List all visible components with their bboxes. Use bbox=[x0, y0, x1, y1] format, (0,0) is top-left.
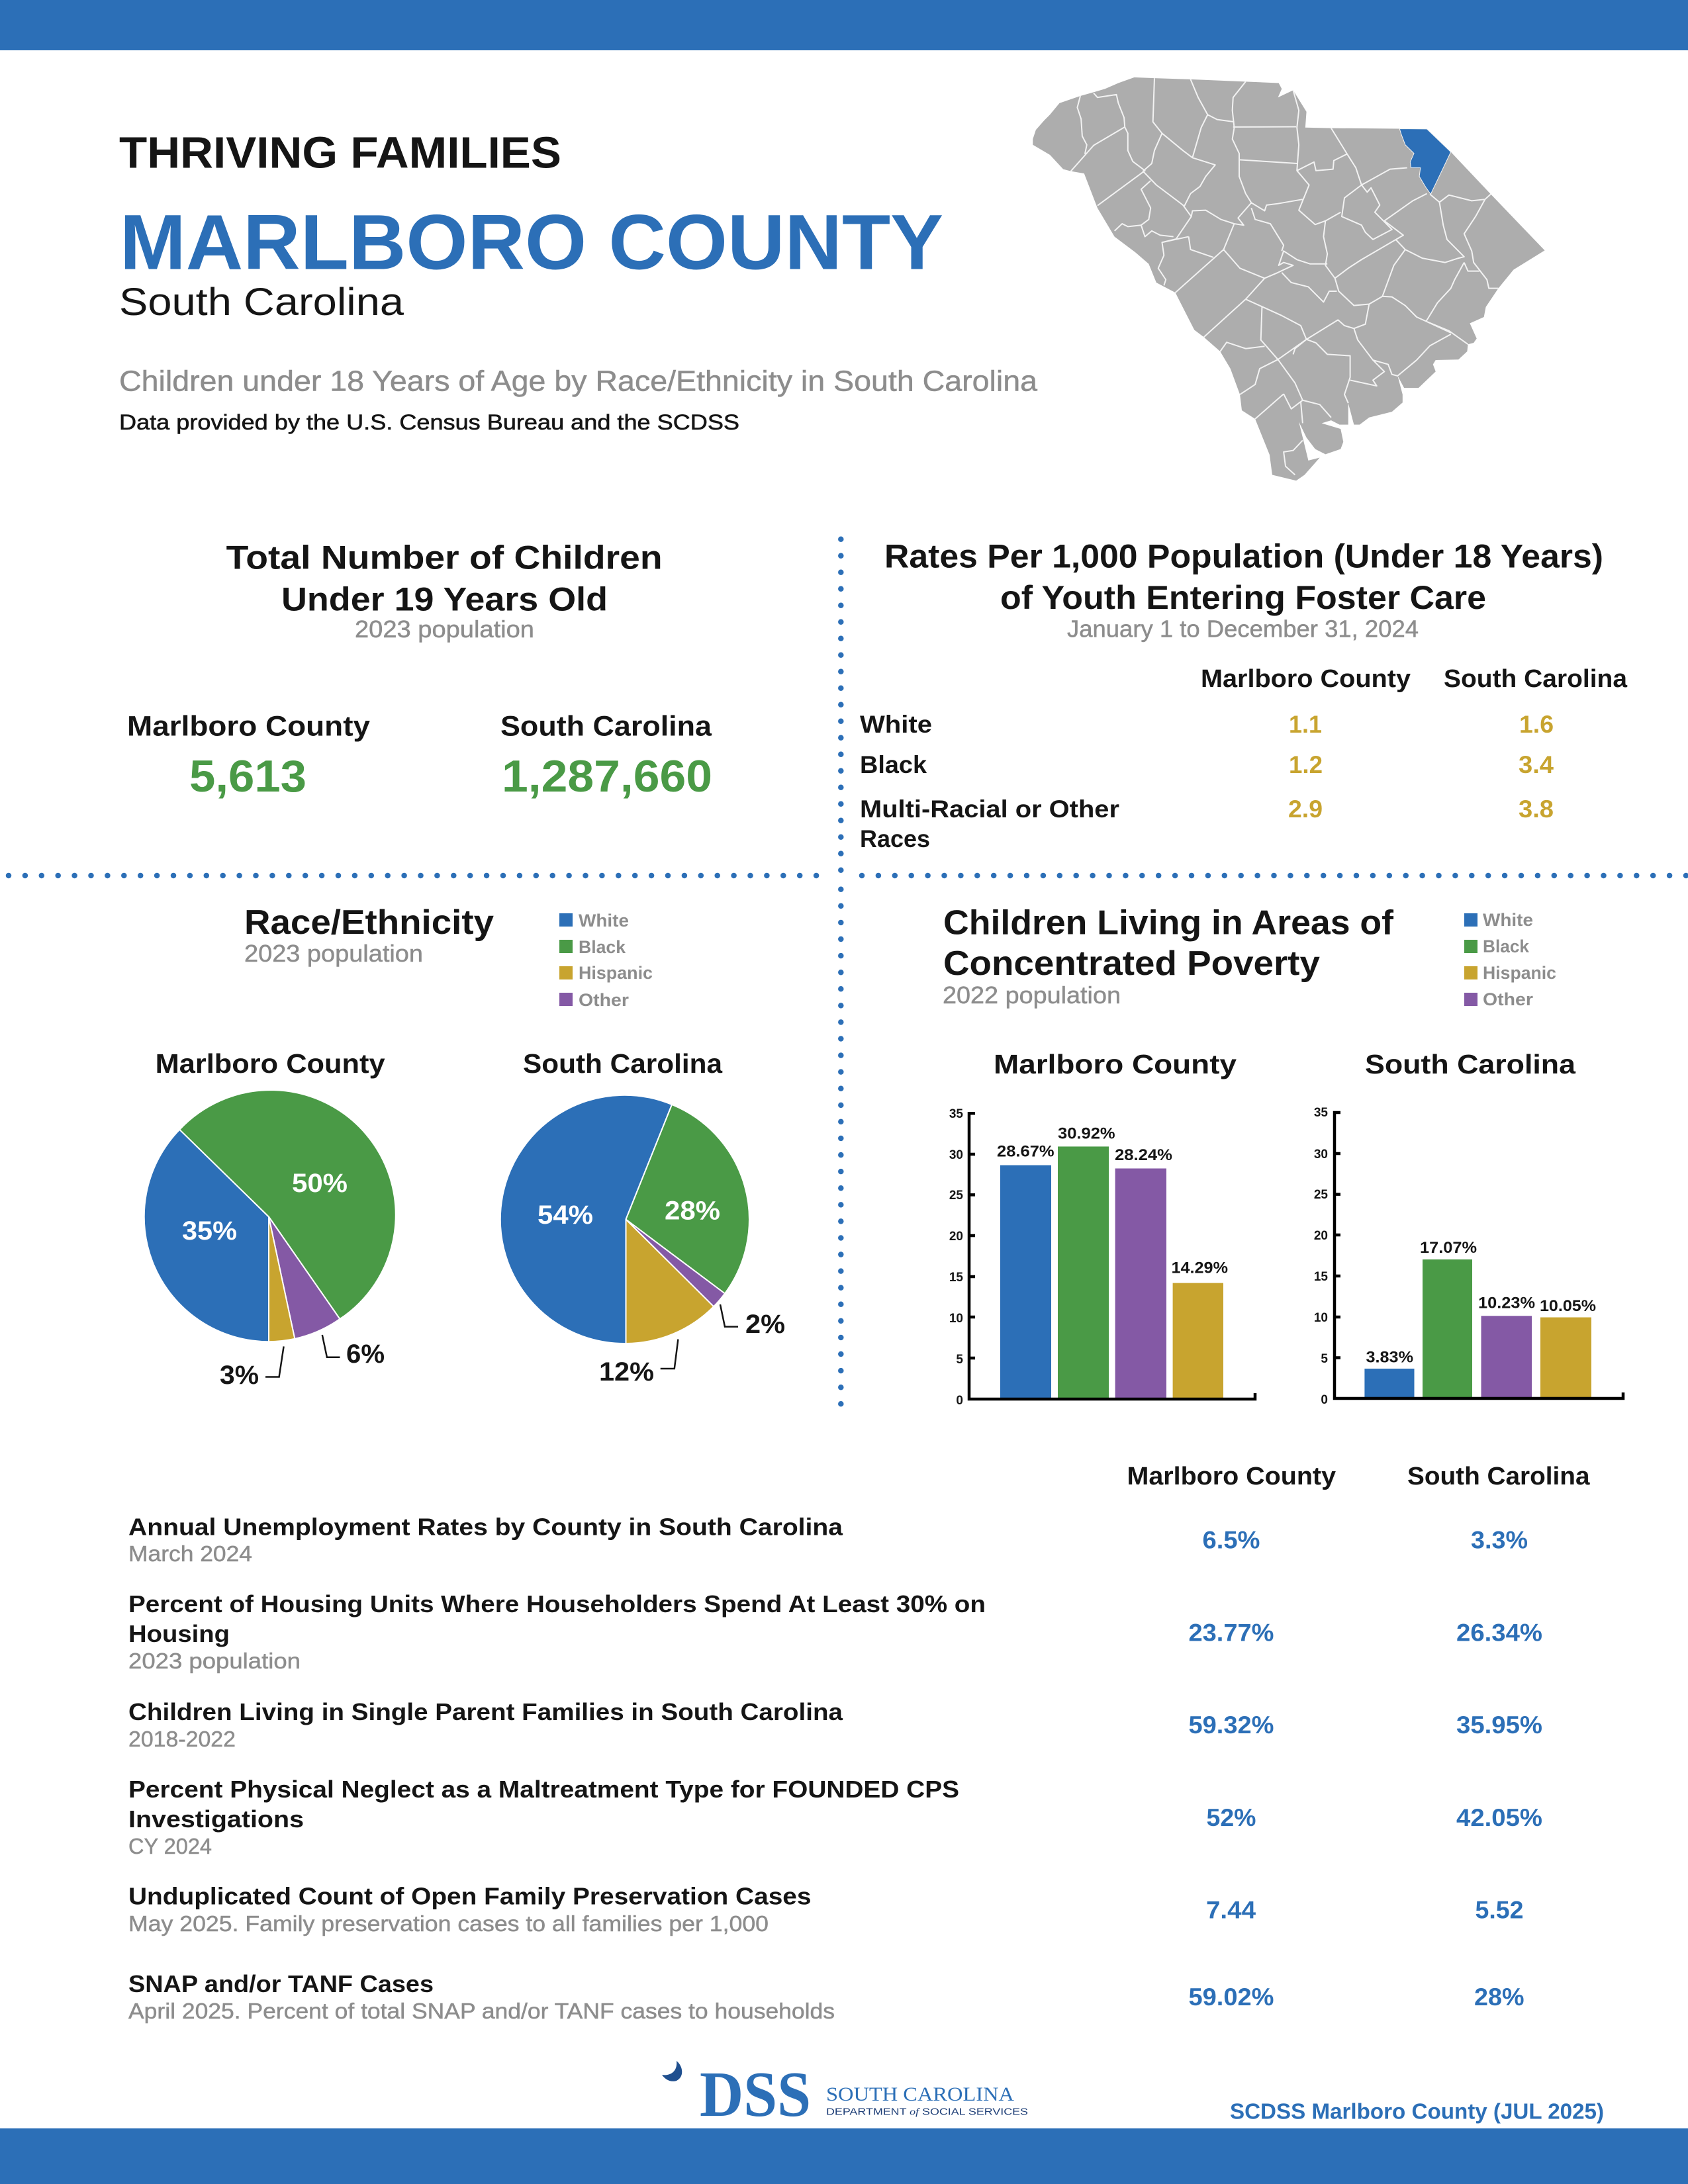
bar values: 14.29% bbox=[1172, 1259, 1228, 1277]
pie labels: Marlboro: 3% bbox=[220, 1361, 259, 1390]
subheading: 2022 population bbox=[943, 981, 1121, 1009]
heading: Rates Per 1,000 Population (Under 18 Years) bbox=[884, 538, 1603, 575]
heading: Total Number of Children bbox=[226, 539, 663, 576]
row: family preservation: 5.52 bbox=[1475, 1896, 1524, 1923]
pie labels: Marlboro: 6% bbox=[346, 1340, 385, 1369]
row: Multi-Racial: 3.8 bbox=[1519, 796, 1554, 823]
pie chart: Marlboro bbox=[144, 1090, 396, 1342]
row: unemployment: Annual Unemployment Rates by County in South Carolina bbox=[128, 1513, 843, 1540]
bar values: 30.92% bbox=[1058, 1125, 1115, 1143]
pie labels: South Carolina: 12% bbox=[599, 1357, 654, 1387]
row: housing: 26.34% bbox=[1456, 1619, 1542, 1647]
agency subtitle: DEPARTMENT of SOCIAL SERVICES bbox=[826, 2107, 1028, 2118]
axes bbox=[1335, 1113, 1623, 1398]
pie labels: Marlboro bbox=[182, 1169, 385, 1390]
bar chart: Marlboro bbox=[949, 1107, 1255, 1408]
bar values: 17.07% bbox=[1420, 1239, 1477, 1257]
row: White: White bbox=[860, 711, 932, 738]
axis numbers: 10 bbox=[949, 1312, 963, 1326]
row: physical neglect: Investigations bbox=[128, 1805, 304, 1833]
map: South Carolina counties with Marlboro highlighted bbox=[1033, 77, 1545, 480]
pie labels: Marlboro: 50% bbox=[292, 1169, 348, 1198]
column head: South Carolina: South Carolina bbox=[1444, 665, 1628, 693]
legend: White bbox=[1483, 910, 1533, 930]
heading line 2: Concentrated Poverty bbox=[943, 944, 1320, 983]
legend: Black bbox=[1483, 936, 1530, 956]
panel: total number of children bbox=[127, 539, 712, 801]
row: unemployment: March 2024 bbox=[128, 1541, 252, 1566]
Marlboro county shape bbox=[1399, 128, 1451, 194]
heading line 2: Under 19 Years Old bbox=[281, 581, 608, 618]
row: physical neglect: CY 2024 bbox=[128, 1834, 212, 1858]
bar chart: South Carolina bbox=[1314, 1106, 1623, 1407]
row: unemployment: 6.5% bbox=[1202, 1526, 1260, 1553]
row: physical neglect bbox=[128, 1776, 1542, 1858]
axis numbers: 0 bbox=[956, 1394, 963, 1408]
pie chart: South Carolina bbox=[500, 1095, 749, 1343]
logo: SC DSS bbox=[662, 2059, 1028, 2130]
row: Black: Black bbox=[860, 751, 927, 778]
bar values: 3.83% bbox=[1366, 1349, 1413, 1367]
panel: foster care rates bbox=[860, 538, 1628, 852]
row: housing: 2023 population bbox=[128, 1649, 301, 1673]
header text block bbox=[119, 128, 1038, 434]
bar heading: South Carolina: South Carolina bbox=[1365, 1049, 1576, 1079]
pie labels: South Carolina: 28% bbox=[665, 1197, 720, 1226]
panel: race/ethnicity bbox=[144, 903, 785, 1390]
column head: Marlboro: Marlboro County bbox=[1127, 1463, 1336, 1490]
axis numbers: 35 bbox=[1314, 1106, 1328, 1120]
pie labels: South Carolina: 54% bbox=[538, 1201, 593, 1230]
row: housing: Housing bbox=[128, 1620, 230, 1647]
heading line 2: of Youth Entering Foster Care bbox=[1000, 579, 1486, 616]
main title: MARLBORO COUNTY bbox=[120, 199, 943, 286]
heading: Race/Ethnicity bbox=[244, 903, 494, 942]
row: family preservation bbox=[128, 1883, 1524, 1936]
row: unemployment: 3.3% bbox=[1471, 1526, 1528, 1553]
axis numbers: 30 bbox=[1314, 1148, 1328, 1161]
data source: Data provided by the U.S. Census Bureau and the SCDSS bbox=[119, 410, 739, 434]
row: Multi-Racial: 2.9 bbox=[1288, 796, 1323, 823]
row: White bbox=[860, 711, 1554, 738]
row: single parent families: 59.32% bbox=[1189, 1711, 1274, 1739]
row: SNAP/TANF bbox=[128, 1970, 1524, 2023]
bar values: 10.05% bbox=[1540, 1297, 1596, 1315]
bar values bbox=[1366, 1239, 1596, 1367]
column head: Marlboro: Marlboro County bbox=[1201, 665, 1411, 693]
bar values: 28.67% bbox=[997, 1142, 1055, 1160]
dotted divider: vertical lower bbox=[838, 889, 844, 1406]
axis numbers: 30 bbox=[949, 1148, 963, 1162]
axis numbers: 15 bbox=[1314, 1270, 1328, 1284]
row: family preservation: 7.44 bbox=[1206, 1896, 1256, 1923]
South Carolina label: South Carolina bbox=[500, 711, 712, 743]
top banner bbox=[0, 0, 1688, 50]
row: Multi-Racial: Races bbox=[860, 825, 930, 852]
axis numbers bbox=[949, 1107, 963, 1408]
state subtitle: South Carolina bbox=[119, 281, 404, 324]
pie heading: Marlboro: Marlboro County bbox=[156, 1048, 385, 1079]
bar heading: Marlboro: Marlboro County bbox=[994, 1049, 1237, 1079]
axis numbers: 20 bbox=[1314, 1229, 1328, 1243]
row: Black: 1.2 bbox=[1289, 751, 1323, 778]
icon: crescent moon bbox=[662, 2061, 682, 2081]
footer credit: SCDSS Marlboro County (JUL 2025) bbox=[1230, 2099, 1604, 2124]
legend: Hispanic bbox=[579, 963, 653, 983]
axis numbers: 25 bbox=[1314, 1188, 1328, 1202]
legend: White bbox=[579, 911, 629, 931]
table: county comparison indicators bbox=[128, 1463, 1590, 2023]
Marlboro count: 5,613 bbox=[189, 751, 306, 801]
axes bbox=[969, 1113, 1255, 1399]
row: unemployment bbox=[128, 1513, 1528, 1566]
heading: Children Living in Areas of bbox=[943, 904, 1394, 942]
legend bbox=[559, 911, 653, 1010]
axis numbers: 25 bbox=[949, 1189, 963, 1203]
pie labels: South Carolina: 2% bbox=[745, 1310, 785, 1339]
dotted divider: horizontal left bbox=[9, 873, 824, 878]
bottom banner bbox=[0, 2128, 1688, 2184]
row: housing: Percent of Housing Units Where Householders Spend At Least 30% on bbox=[128, 1590, 986, 1617]
row: housing: 23.77% bbox=[1189, 1619, 1274, 1647]
legend: Hispanic bbox=[1483, 963, 1556, 983]
row: single parent families bbox=[128, 1698, 1542, 1751]
DSS wordmark: DSS bbox=[700, 2059, 811, 2130]
legend: Other bbox=[579, 990, 630, 1010]
legend: Black bbox=[579, 937, 626, 957]
axis numbers: 0 bbox=[1321, 1393, 1328, 1407]
subheading: 2023 population bbox=[244, 940, 423, 967]
row: Multi-Racial bbox=[860, 796, 1554, 852]
dotted divider: vertical upper bbox=[838, 539, 844, 874]
row: Black: 3.4 bbox=[1519, 751, 1554, 778]
row: SNAP/TANF: 59.02% bbox=[1189, 1983, 1274, 2011]
row: SNAP/TANF: SNAP and/or TANF Cases bbox=[128, 1970, 434, 1997]
bar values: 28.24% bbox=[1115, 1146, 1172, 1164]
agency name: SOUTH CAROLINA bbox=[826, 2083, 1014, 2105]
subheading: 2023 population bbox=[355, 615, 534, 643]
axis numbers bbox=[1314, 1106, 1328, 1407]
axis numbers: 5 bbox=[956, 1353, 963, 1367]
row: Black bbox=[860, 751, 1554, 778]
bars bbox=[1364, 1259, 1591, 1397]
row: SNAP/TANF: 28% bbox=[1474, 1983, 1524, 2011]
pie labels: Marlboro: 35% bbox=[182, 1216, 237, 1246]
dotted divider: horizontal right bbox=[862, 873, 1687, 878]
row: family preservation: May 2025. Family preservation cases to all families per 1,000 bbox=[128, 1911, 769, 1936]
description: Children under 18 Years of Age by Race/Ethnicity in South Carolina bbox=[119, 365, 1038, 397]
panel: concentrated poverty bbox=[943, 904, 1623, 1408]
axis numbers: 5 bbox=[1321, 1352, 1328, 1366]
Marlboro label: Marlboro County bbox=[127, 711, 370, 743]
row: single parent families: 35.95% bbox=[1456, 1711, 1542, 1739]
row: physical neglect: 42.05% bbox=[1456, 1804, 1542, 1831]
row: single parent families: 2018-2022 bbox=[128, 1727, 236, 1751]
legend bbox=[1464, 910, 1556, 1009]
row: physical neglect: 52% bbox=[1206, 1804, 1256, 1831]
eyebrow title: THRIVING FAMILIES bbox=[119, 128, 561, 177]
South Carolina count: 1,287,660 bbox=[502, 751, 712, 801]
row: Multi-Racial: Multi-Racial or Other bbox=[860, 796, 1119, 823]
row: White: 1.1 bbox=[1289, 711, 1322, 738]
row: White: 1.6 bbox=[1519, 711, 1554, 738]
bar values bbox=[997, 1125, 1228, 1277]
subheading: January 1 to December 31, 2024 bbox=[1067, 615, 1419, 643]
bars bbox=[1000, 1146, 1223, 1398]
row: family preservation: Unduplicated Count of Open Family Preservation Cases bbox=[128, 1883, 812, 1910]
axis numbers: 10 bbox=[1314, 1311, 1328, 1325]
axis numbers: 20 bbox=[949, 1230, 963, 1244]
column head: South Carolina: South Carolina bbox=[1407, 1463, 1590, 1490]
pie labels: South Carolina bbox=[538, 1197, 785, 1387]
pie heading: South Carolina: South Carolina bbox=[523, 1048, 723, 1079]
axis numbers: 35 bbox=[949, 1107, 963, 1121]
row: SNAP/TANF: April 2025. Percent of total SNAP and/or TANF cases to households bbox=[128, 1999, 835, 2023]
legend: Other bbox=[1483, 989, 1534, 1009]
axis numbers: 15 bbox=[949, 1271, 963, 1285]
bar values: 10.23% bbox=[1478, 1295, 1535, 1312]
row: single parent families: Children Living in Single Parent Families in South Carolina bbox=[128, 1698, 843, 1725]
row: physical neglect: Percent Physical Neglect as a Maltreatment Type for FOUNDED CPS bbox=[128, 1776, 959, 1803]
row: housing bbox=[128, 1590, 1542, 1673]
